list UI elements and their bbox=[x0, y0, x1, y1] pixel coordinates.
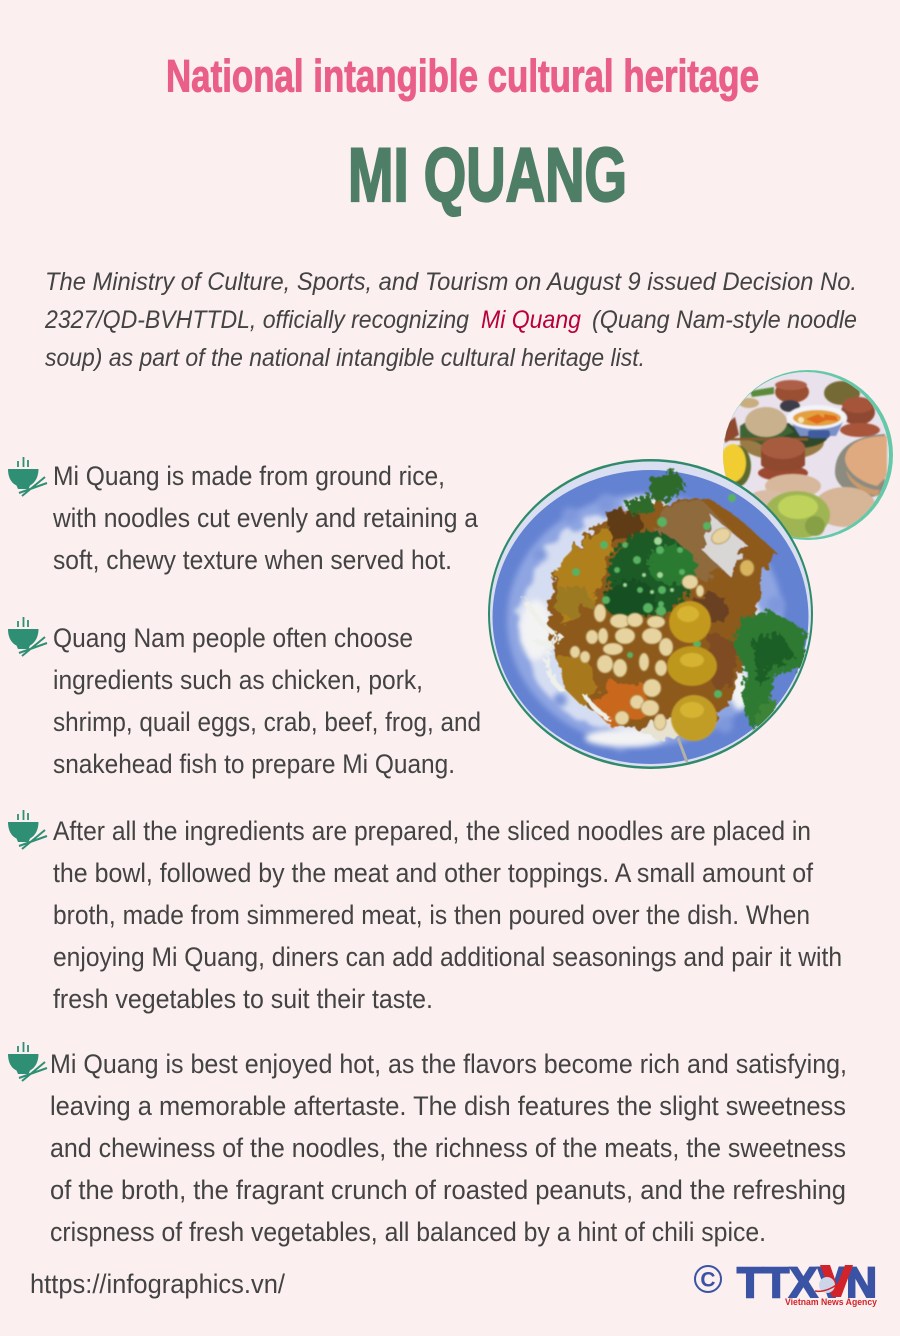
bullet 2: shrimp, quail eggs, crab, beef, frog, and bbox=[53, 707, 481, 737]
intro paragraph bbox=[44, 268, 857, 372]
fresh greens bbox=[764, 491, 830, 539]
bullet 4: of the broth, the fragrant crunch of roasted peanuts, and the refreshing bbox=[50, 1175, 846, 1205]
bullet 1: with noodles cut evenly and retaining a bbox=[52, 503, 479, 533]
bullet 2: ingredients such as chicken, pork, bbox=[53, 665, 423, 695]
intro paragraph: 2327/QD-BVHTTDL, officially recognizing bbox=[44, 306, 469, 334]
dried noodle piles bbox=[765, 474, 821, 498]
footer URL: https://infographics.vn/ bbox=[30, 1269, 285, 1299]
chopped scallions bbox=[604, 470, 808, 739]
title: MI QUANG: MI QUANG bbox=[348, 133, 627, 218]
central clay pot bbox=[758, 465, 808, 481]
food base bbox=[548, 498, 776, 740]
bullet 2: snakehead fish to prepare Mi Quang. bbox=[53, 749, 455, 779]
bullet 4: crispness of fresh vegetables, all balanced by a hint of chili spice. bbox=[50, 1217, 766, 1247]
bullet 3: the bowl, followed by the meat and other toppings. A small amount of bbox=[53, 858, 813, 888]
shredded veg on left bbox=[525, 600, 609, 719]
icon: noodle bowl bbox=[8, 810, 47, 849]
bullet 3: broth, made from simmered meat, is then poured over the dish. When bbox=[53, 900, 810, 930]
bullet 4: Mi Quang is best enjoyed hot, as the flavors become rich and satisfying, bbox=[50, 1049, 847, 1079]
bullet 1: Mi Quang is made from ground rice, bbox=[53, 461, 445, 491]
bullet 3 bbox=[8, 810, 842, 1014]
bullet 2: Quang Nam people often choose bbox=[53, 623, 413, 653]
bullet 3: fresh vegetables to suit their taste. bbox=[53, 984, 433, 1014]
bullet 4 bbox=[8, 1042, 847, 1247]
logo: TTXVN Vietnam News Agency: TTXVN bbox=[737, 1259, 877, 1307]
intro paragraph: soup) as part of the national intangible cultural heritage list. bbox=[45, 344, 645, 372]
intro paragraph: The Ministry of Culture, Sports, and Tourism on August 9 issued Decision No. bbox=[45, 268, 857, 296]
central blue bowl bbox=[787, 405, 847, 431]
intro paragraph: (Quang Nam-style noodle bbox=[592, 306, 857, 334]
peanuts bbox=[570, 525, 754, 730]
rice crackers bbox=[835, 434, 885, 498]
bullet 4: and chewiness of the noodles, the richness of the meats, the sweetness bbox=[50, 1133, 846, 1163]
intro paragraph: Mi Quang bbox=[481, 306, 581, 334]
yellow noodles bbox=[734, 444, 752, 486]
tray and greens bbox=[739, 440, 825, 458]
logo: TTXVN Vietnam News Agency: Vietnam News Agency bbox=[785, 1297, 877, 1307]
top items bbox=[774, 386, 810, 404]
bullet 4: leaving a memorable aftertaste. The dish features the slight sweetness bbox=[50, 1091, 846, 1121]
icon: noodle bowl bbox=[8, 457, 47, 496]
bullet 2 bbox=[8, 617, 481, 779]
copyright symbol bbox=[695, 1266, 721, 1292]
icon: noodle bowl bbox=[8, 617, 47, 656]
bullet 3: enjoying Mi Quang, diners can add additional seasonings and pair it with bbox=[53, 942, 842, 972]
small circular photo: table of dishes bbox=[720, 370, 893, 540]
pale patterned ring bbox=[507, 494, 783, 746]
bullet 1: soft, chewy texture when served hot. bbox=[53, 545, 452, 575]
photo: bowl of Mi Quang noodles bbox=[488, 459, 813, 770]
copyright symbol: C bbox=[700, 1268, 716, 1292]
quail eggs bbox=[667, 601, 717, 741]
chopstick tip bbox=[676, 738, 688, 762]
bullet 1 bbox=[8, 457, 479, 575]
icon: noodle bowl bbox=[8, 1042, 47, 1081]
bullet 3: After all the ingredients are prepared, the sliced noodles are placed in bbox=[53, 816, 811, 846]
